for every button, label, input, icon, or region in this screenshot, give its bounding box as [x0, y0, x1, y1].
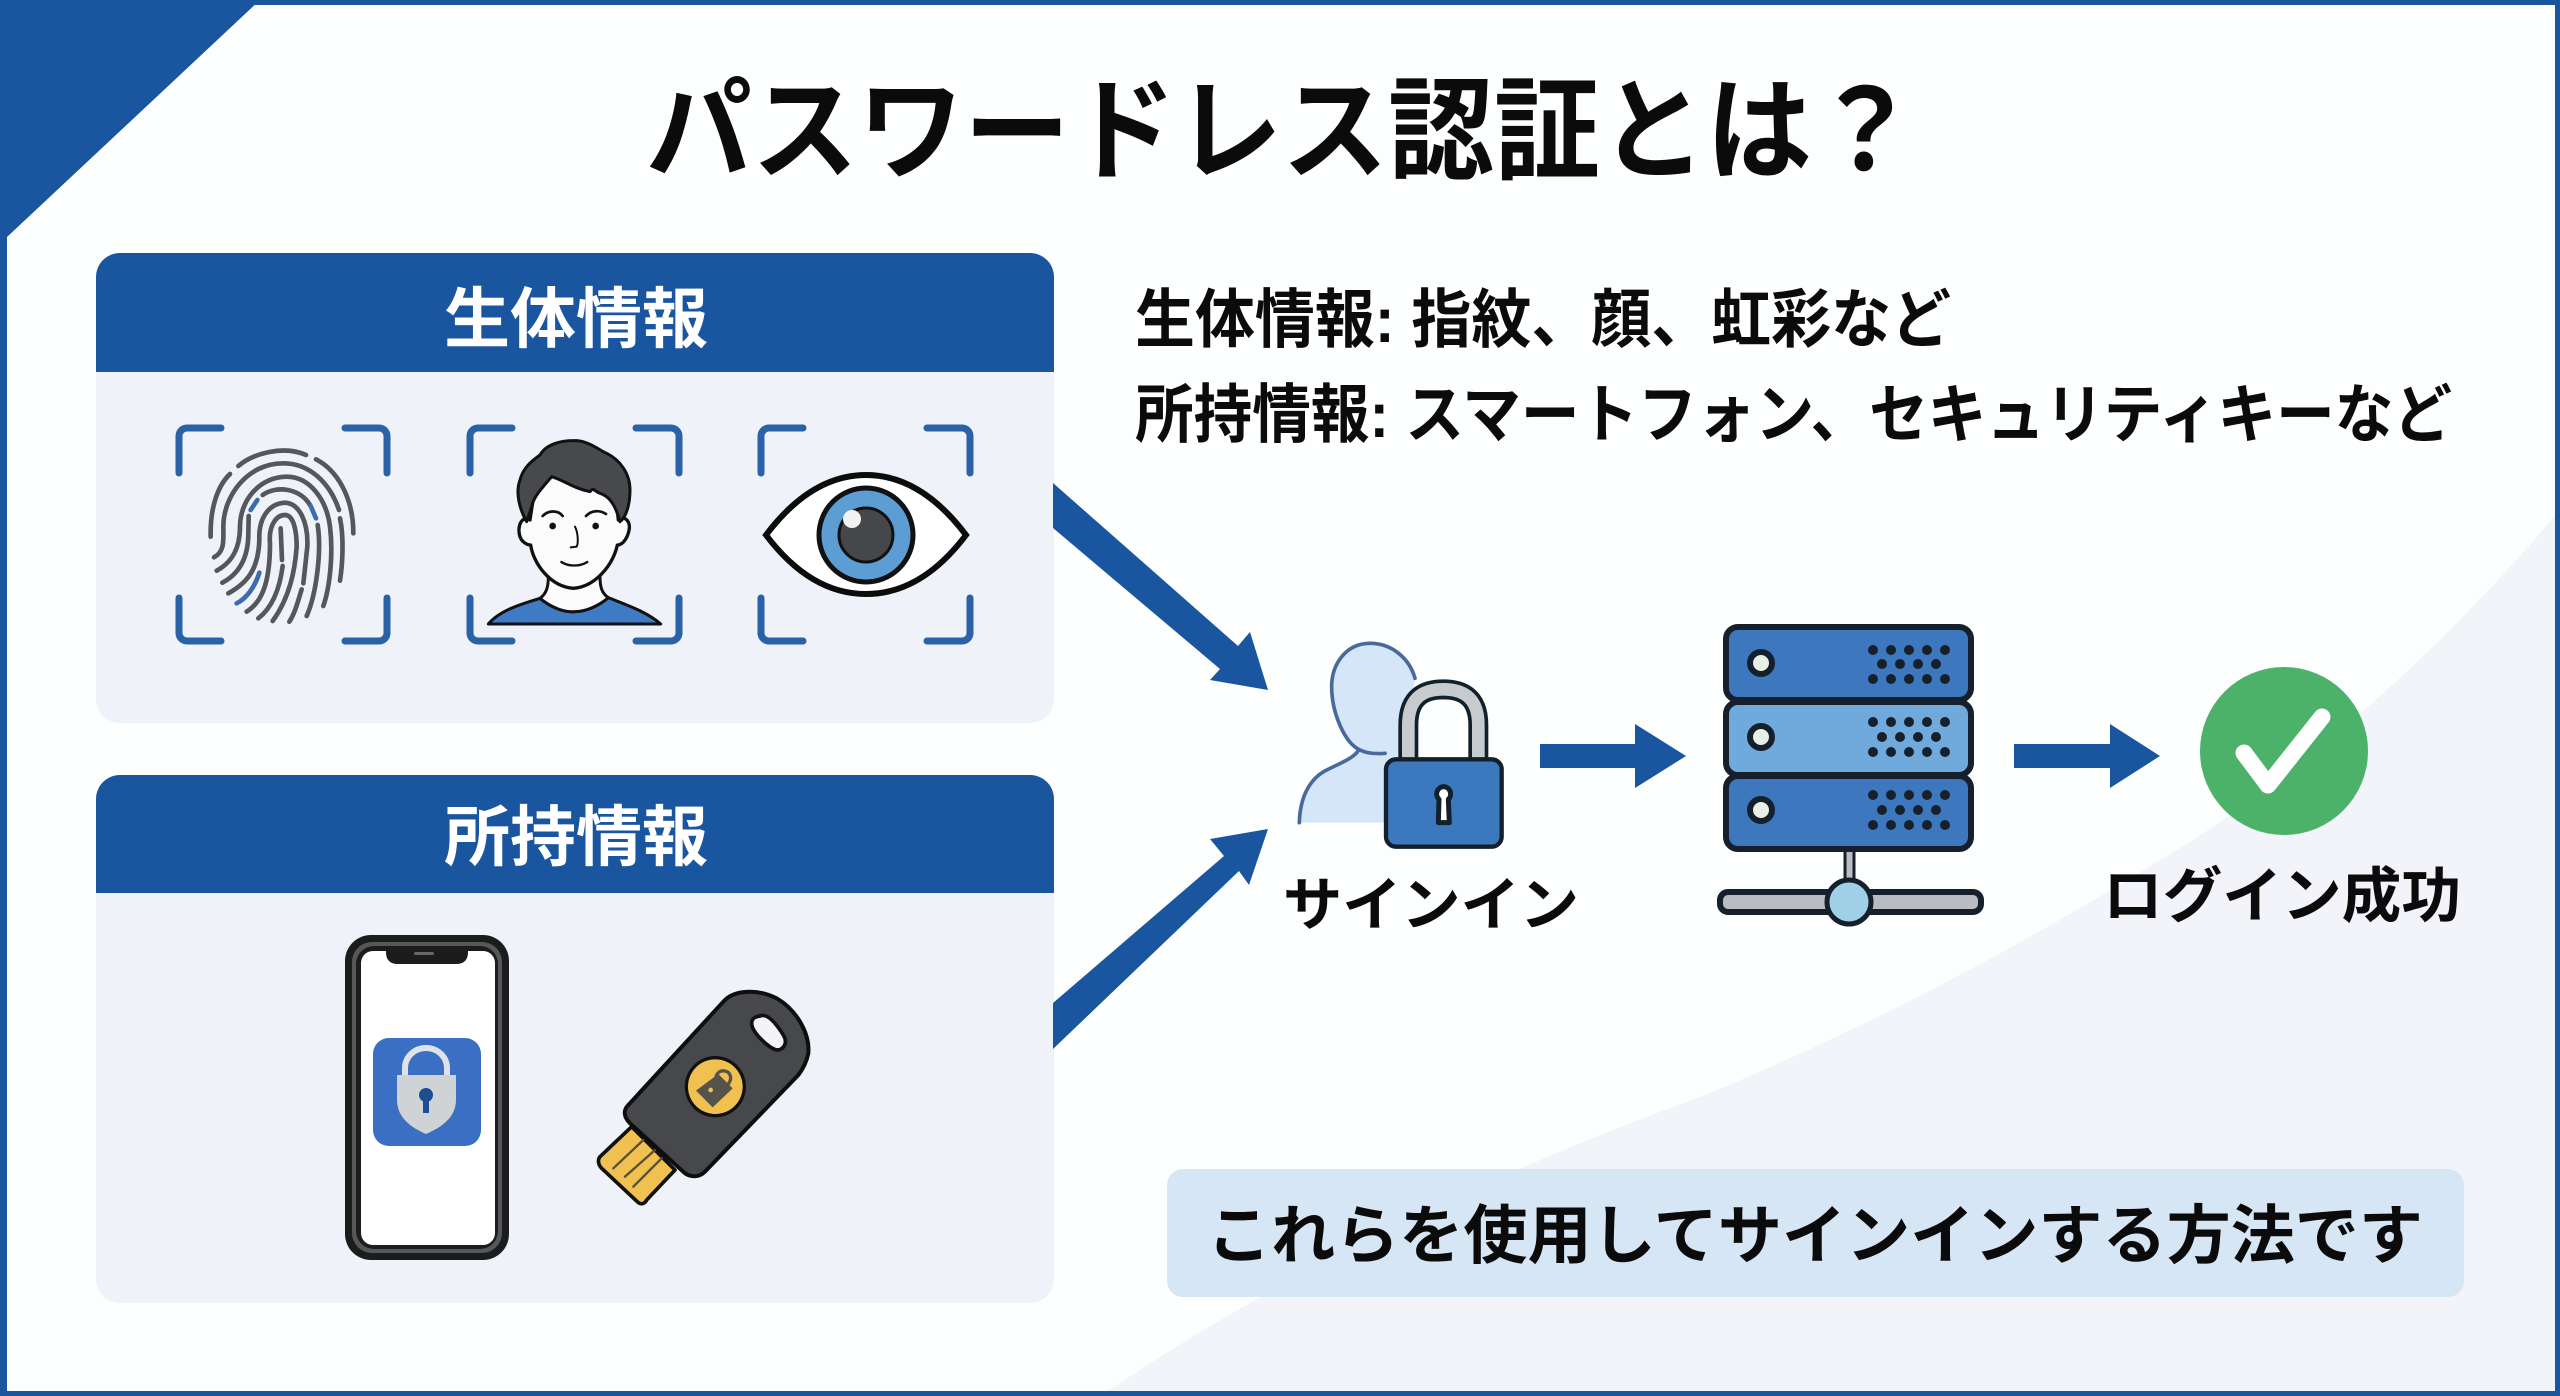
icon: success check	[2200, 667, 2368, 835]
icon: app lock	[373, 1038, 481, 1146]
scan frames	[179, 428, 970, 641]
icon: security key	[598, 992, 808, 1204]
panel: biometric information	[96, 253, 1054, 723]
icon: eye	[766, 475, 966, 594]
icon: smartphone	[345, 935, 509, 1260]
title: パスワードレス認証とは？	[646, 69, 1918, 194]
panel: possession information	[96, 775, 1054, 1303]
corner accent	[0, 0, 260, 240]
icon: sign-in user with lock	[1299, 643, 1502, 847]
right description text: 生体情報: 指紋、顔、虹彩など	[1135, 284, 1951, 356]
arrow: possession to sign-in	[1053, 829, 1268, 1049]
arrow: biometric to sign-in	[1053, 483, 1268, 690]
callout: これらを使用してサインインする方法です	[1207, 1200, 2423, 1272]
label: sign-in: サインイン	[1283, 873, 1579, 938]
icon: server	[1720, 627, 1981, 924]
arrow: server to success	[2014, 724, 2160, 788]
icon: face	[488, 441, 661, 624]
heading: biometric: 生体情報	[444, 282, 708, 356]
label: login success: ログイン成功	[2103, 863, 2461, 930]
callout	[1167, 1169, 2464, 1297]
icon: fingerprint	[211, 451, 353, 622]
heading: possession: 所持情報	[444, 800, 708, 874]
right description text	[1135, 284, 2452, 451]
arrow: sign-in to server	[1540, 724, 1686, 788]
right description text: 所持情報: スマートフォン、セキュリティキーなど	[1135, 379, 2452, 451]
